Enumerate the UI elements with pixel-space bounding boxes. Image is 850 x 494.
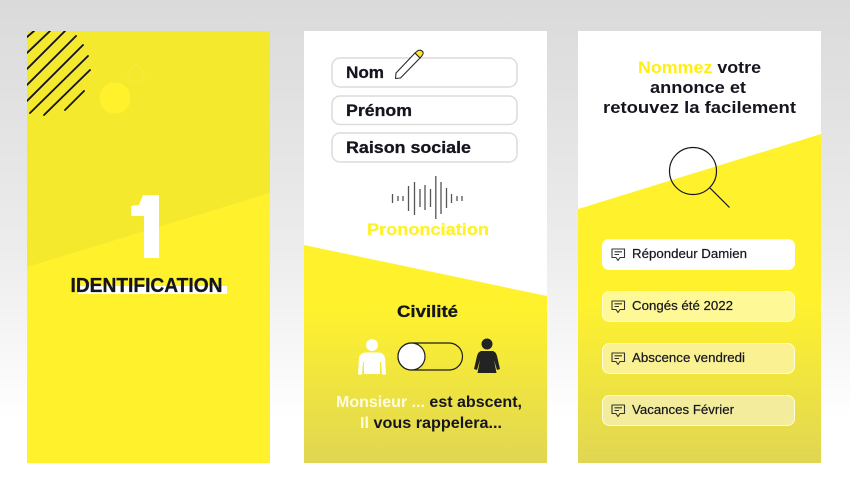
step number: 1 <box>118 178 174 290</box>
field: nom <box>332 58 517 87</box>
field: raison sociale <box>332 133 517 162</box>
item: conges ete 2022: Congés été 2022 <box>632 298 733 313</box>
item: vacances fevrier <box>602 396 794 426</box>
item: repondeur damien: Répondeur Damien <box>632 246 747 261</box>
heading: Nommez votre <box>638 58 761 77</box>
field: raison sociale: Raison sociale <box>346 138 471 157</box>
heading: identification: IDENTIFICATION <box>70 274 222 297</box>
icon: sound wave <box>392 176 462 219</box>
heading: annonce et <box>650 78 746 97</box>
icon: pencil <box>396 50 423 78</box>
field: prenom <box>332 96 517 124</box>
field: nom: Nom <box>346 63 384 82</box>
field: prenom: Prénom <box>346 101 412 120</box>
icon: small yellow circle <box>100 82 130 114</box>
heading <box>603 58 796 117</box>
icon: faint ring <box>128 66 144 82</box>
item: repondeur damien <box>602 239 795 270</box>
panel: name form <box>304 31 547 463</box>
icon: woman <box>474 338 500 373</box>
item: absence vendredi <box>602 344 794 374</box>
message text: Monsieur ... est abscent, <box>336 394 522 411</box>
icon: hatched circle <box>27 31 90 115</box>
item: vacances fevrier: Vacances Février <box>632 402 735 417</box>
icon: magnifier <box>670 148 730 208</box>
toggle switch <box>398 343 462 370</box>
message text: Il vous rappelera... <box>360 415 502 432</box>
heading: retouvez la facilement <box>603 98 796 117</box>
icon: man <box>358 339 386 375</box>
message text <box>336 394 522 432</box>
heading: civilite: Civilité <box>397 302 458 321</box>
item: conges ete 2022 <box>602 292 794 322</box>
item: absence vendredi: Abscence vendredi <box>632 350 745 365</box>
label: prononciation: Prononciation <box>367 220 489 239</box>
panel: naming <box>578 31 821 463</box>
white underline <box>78 286 227 294</box>
panel: identification <box>27 31 270 463</box>
